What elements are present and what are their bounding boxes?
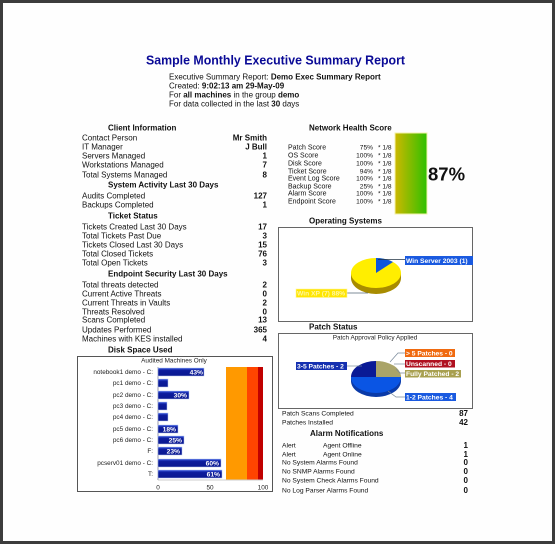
chart: disk space used: pc1 demo - C:: [113, 380, 153, 387]
panel: network health score: * 1/8: [378, 190, 392, 197]
chart: disk space used: 60%: [206, 460, 219, 467]
panel: network health score: * 1/8: [378, 160, 392, 167]
panel: ticket status: 3: [263, 259, 268, 268]
panel: endpoint security: 365: [254, 326, 268, 335]
panel: alarm notifications: No Log Parser Alarms Found: [282, 487, 369, 494]
panel: client information: Workstations Managed: [82, 161, 164, 170]
panel: client information: Mr Smith: [233, 134, 267, 143]
panel: network health score: OS Score: [288, 152, 318, 159]
panel: network health score: * 1/8: [378, 183, 392, 190]
chart: disk space used: T:: [148, 471, 153, 478]
panel: network health score: 100%: [356, 152, 373, 159]
panel: alarm notifications: No System Check Alarms Found: [282, 477, 379, 484]
panel: network health score: * 1/8: [378, 144, 392, 151]
panel: endpoint security: [82, 270, 268, 344]
panel: alarm notifications: 0: [464, 486, 469, 495]
chart: disk space used: Audited Machines Only: [141, 357, 208, 364]
panel: network health score: Disk Score: [288, 160, 322, 167]
chart: disk space used: pc6 demo - C:: [113, 437, 153, 444]
panel: endpoint security: 2: [263, 299, 268, 308]
panel: network health score: 25%: [360, 183, 373, 190]
chart: disk space used: pc4 demo - C:: [113, 414, 153, 421]
panel: ticket status: Total Closed Tickets: [82, 250, 153, 259]
chart: disk space used: pc3 demo - C:: [113, 403, 153, 410]
chart: disk space used: notebook1 demo - C:: [93, 369, 153, 376]
panel: alarm notifications: No System Alarms Found: [282, 459, 358, 466]
heading: patch status: Patch Status: [309, 323, 358, 332]
panel: endpoint security: Updates Performed: [82, 326, 151, 335]
chart: patch status pie: > 5 Patches - 0: [406, 350, 453, 358]
panel: network health score: 75%: [360, 144, 373, 151]
panel: network health score: 100%: [356, 175, 373, 182]
panel: endpoint security: 2: [263, 281, 268, 290]
patch counts: 87: [459, 409, 469, 418]
panel: ticket status: 15: [258, 241, 268, 250]
panel: endpoint security: Current Threats in Vaults: [82, 299, 170, 308]
chart: disk space used: pc5 demo - C:: [113, 426, 153, 433]
chart: disk space used: 100: [258, 484, 269, 491]
report details text block: Executive Summary Report: Demo Exec Summary Report: [169, 73, 381, 82]
panel: network health score: Patch Score: [288, 144, 326, 151]
panel: system activity: Backups Completed: [82, 201, 154, 210]
patch counts: [282, 409, 469, 427]
health score gradient bar: [395, 133, 427, 214]
patch counts: 42: [459, 418, 469, 427]
chart: disk space used: 43%: [190, 369, 203, 376]
chart: disk space used: pc2 demo - C:: [113, 392, 153, 399]
chart: disk space used: 18%: [163, 426, 176, 433]
panel: ticket status: Tickets Created Last 30 Days: [82, 223, 187, 232]
panel: network health score: Event Log Score: [288, 175, 340, 182]
panel: client information: IT Manager: [82, 143, 123, 152]
panel: ticket status: 76: [258, 250, 268, 259]
panel: endpoint security: 4: [263, 335, 268, 344]
panel: alarm notifications: 1: [464, 450, 469, 459]
panel: ticket status: [82, 212, 268, 268]
panel: alarm notifications: 0: [464, 458, 469, 467]
chart: disk space used: 0: [156, 484, 160, 491]
panel: alarm notifications: Alert: [282, 442, 296, 449]
panel: ticket status: 17: [258, 223, 268, 232]
panel: alarm notifications: Agent Offline: [323, 442, 362, 449]
chart: disk space used: pcserv01 demo - C:: [97, 460, 153, 467]
heading: operating systems: Operating Systems: [309, 217, 382, 226]
panel: ticket status: Total Open Tickets: [82, 259, 148, 268]
panel: client information: 8: [263, 171, 268, 180]
panel: client information: Total Systems Managed: [82, 171, 167, 180]
panel: network health score: [288, 124, 392, 205]
panel: endpoint security: Scans Completed: [82, 316, 145, 325]
panel: client information: Client Information: [108, 124, 177, 133]
panel: network health score: Alarm Score: [288, 190, 327, 197]
panel: endpoint security: Threats Resolved: [82, 308, 145, 317]
panel: system activity: 127: [254, 192, 268, 201]
chart: disk space used: 61%: [207, 471, 220, 478]
panel: network health score: Network Health Score: [309, 124, 392, 133]
chart: patch status pie: 3-5 Patches - 2: [297, 364, 344, 370]
panel: alarm notifications: 0: [464, 467, 469, 476]
panel: network health score: Endpoint Score: [288, 198, 336, 205]
chart: operating systems pie: [278, 228, 473, 322]
report details text block: For data collected in the last 30 days: [169, 100, 299, 109]
panel: ticket status: Ticket Status: [108, 212, 158, 221]
panel: client information: 1: [263, 152, 268, 161]
panel: ticket status: Tickets Closed Last 30 Days: [82, 241, 183, 250]
chart: patch status pie: Unscanned - 0: [406, 361, 452, 368]
panel: alarm notifications: Agent Online: [323, 451, 362, 458]
panel: network health score: 100%: [356, 160, 373, 167]
panel: system activity: [82, 181, 268, 210]
panel: network health score: * 1/8: [378, 168, 392, 175]
panel: client information: J Bull: [245, 143, 267, 152]
panel: alarm notifications: Alarm Notifications: [310, 429, 384, 438]
panel: alarm notifications: 1: [464, 441, 469, 450]
panel: network health score: 100%: [356, 190, 373, 197]
panel: network health score: Ticket Score: [288, 168, 327, 175]
report details text block: Created: 9:02:13 am 29-May-09: [169, 82, 285, 91]
chart: patch status pie: Patch Approval Policy Applied: [333, 334, 418, 341]
panel: alarm notifications: Alert: [282, 451, 296, 458]
chart: patch status pie: Fully Patched - 2: [406, 371, 459, 378]
panel: endpoint security: 0: [263, 290, 268, 299]
panel: endpoint security: Total threats detected: [82, 281, 158, 290]
chart: patch status pie: 1-2 Patches - 4: [406, 394, 453, 402]
chart: operating systems pie: Win XP (7) 88%: [297, 291, 345, 298]
chart: disk space used: 25%: [169, 437, 182, 444]
chart: patch status pie: [278, 334, 472, 408]
panel: system activity: Audits Completed: [82, 192, 145, 201]
panel: endpoint security: Endpoint Security Last 30 Days: [108, 270, 228, 279]
chart: disk space used: [78, 356, 272, 492]
panel: system activity: System Activity Last 30 Days: [108, 181, 219, 190]
panel: endpoint security: Machines with KES installed: [82, 335, 182, 344]
patch counts: Patches Installed: [282, 420, 333, 426]
panel: client information: 7: [263, 161, 268, 170]
chart: disk space used: F:: [147, 448, 153, 455]
panel: endpoint security: Current Active Threats: [82, 290, 161, 299]
panel: network health score: 94%: [360, 168, 373, 175]
panel: alarm notifications: [282, 429, 469, 495]
panel: alarm notifications: 0: [464, 476, 469, 485]
report details text block: For all machines in the group demo: [169, 91, 299, 100]
panel: alarm notifications: No SNMP Alarms Found: [282, 468, 355, 475]
chart: operating systems pie: Win Server 2003 (1): [406, 258, 468, 265]
chart: disk space used: 50: [206, 484, 214, 491]
panel: ticket status: Total Tickets Past Due: [82, 232, 162, 241]
report details text block: [169, 73, 381, 109]
panel: network health score: 100%: [356, 198, 373, 205]
panel: client information: Servers Managed: [82, 152, 145, 161]
panel: system activity: 1: [263, 201, 268, 210]
panel: client information: [82, 124, 268, 180]
panel: ticket status: 3: [263, 232, 268, 241]
panel: network health score: Backup Score: [288, 183, 332, 190]
panel: client information: Contact Person: [82, 134, 137, 143]
panel: network health score: * 1/8: [378, 175, 392, 182]
title: Sample Monthly Executive Summary Report: [146, 54, 406, 68]
chart: disk space used: 30%: [174, 392, 187, 399]
panel: network health score: * 1/8: [378, 198, 392, 205]
panel: network health score: * 1/8: [378, 152, 392, 159]
health score value: 87%: [428, 164, 465, 185]
heading: disk space used: Disk Space Used: [108, 346, 173, 355]
panel: endpoint security: 0: [263, 308, 268, 317]
patch counts: Patch Scans Completed: [282, 410, 354, 418]
chart: disk space used: 23%: [167, 448, 180, 455]
panel: endpoint security: 13: [258, 316, 268, 325]
